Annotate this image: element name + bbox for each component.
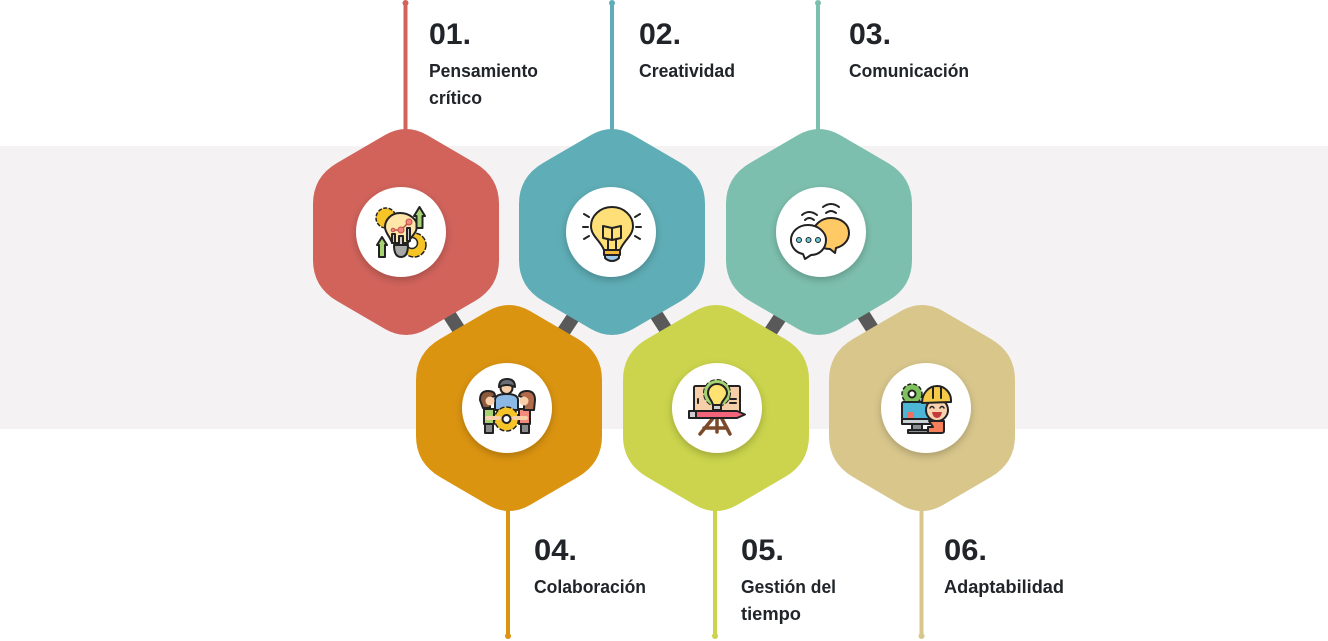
hexagon	[416, 305, 602, 511]
panel: 03 comunicacion	[726, 0, 969, 335]
panel: 04 colaboracion	[416, 305, 646, 639]
icon: speech bubbles	[776, 187, 866, 277]
number: 02.	[639, 18, 681, 51]
icon: planning board with bulb and pencil	[672, 363, 762, 453]
panel: 02 creatividad	[519, 0, 735, 335]
stem line	[609, 0, 615, 133]
label: Gestión del	[741, 577, 836, 597]
number: 05.	[741, 534, 784, 567]
panel: 05 gestion del tiempo	[623, 305, 836, 639]
number: 03.	[849, 18, 891, 51]
hexagon	[623, 305, 809, 511]
icon: idea bulb with book	[566, 187, 656, 277]
panel: 01 pensamiento critico	[313, 0, 538, 335]
hexagon	[313, 129, 499, 335]
hexagon	[829, 305, 1015, 511]
number: 04.	[534, 534, 577, 567]
icon: engineer at computer	[881, 363, 971, 453]
number: 06.	[944, 534, 987, 567]
stem line	[918, 505, 924, 639]
stem line	[712, 505, 718, 639]
label: Creatividad	[639, 61, 735, 81]
label: Pensamiento	[429, 61, 538, 81]
background band	[0, 146, 1328, 429]
connectors between hexagons	[445, 307, 877, 343]
label: Adaptabilidad	[944, 577, 1064, 597]
label: Comunicación	[849, 61, 969, 81]
stem line	[402, 0, 408, 133]
icon: critical thinking bulb	[356, 187, 446, 277]
label: tiempo	[741, 604, 801, 624]
label: Colaboración	[534, 577, 646, 597]
stem line	[815, 0, 821, 133]
panel: 06 adaptabilidad	[829, 305, 1064, 639]
stem line	[505, 505, 511, 639]
label: crítico	[429, 88, 482, 108]
icon: collaboration team with gear	[462, 363, 552, 453]
hexagon	[726, 129, 912, 335]
number: 01.	[429, 18, 471, 51]
hexagon	[519, 129, 705, 335]
